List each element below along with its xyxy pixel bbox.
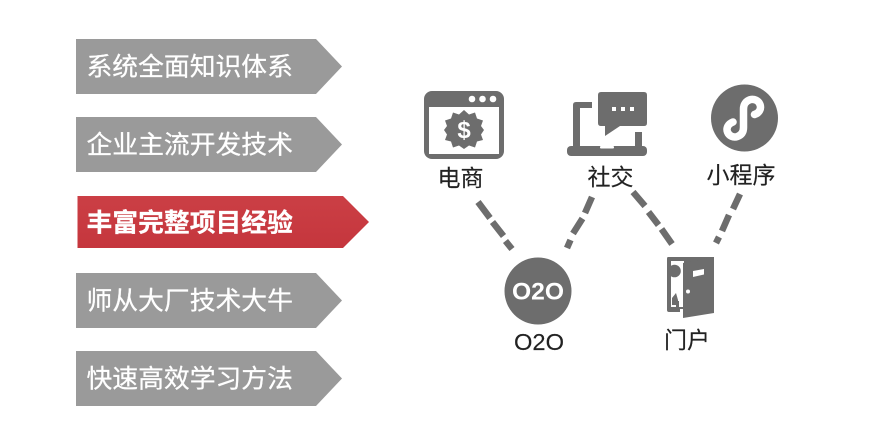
arrow item: 企业主流开发技术: [76, 117, 342, 172]
label: O2O: O2O: [514, 329, 564, 355]
icon: O2O circle badge: O2O: [512, 278, 564, 306]
icon: O2O circle badge: [504, 258, 572, 324]
icon: social laptop with chat bubble: [567, 92, 647, 156]
arrow item: 丰富完整项目经验 (highlighted): [78, 196, 369, 248]
icon: e-commerce browser window: [424, 91, 504, 159]
arrow item: 快速高效学习方法: [76, 351, 342, 406]
icon: e-commerce browser window: $: [457, 117, 471, 144]
arrow item: 师从大厂技术大牛: [76, 273, 342, 328]
label: 社交: 社交: [588, 164, 634, 190]
arrow item: 系统全面知识体系: 系统全面知识体系: [86, 52, 293, 82]
label: 电商: 电商: [438, 165, 484, 191]
dashed connector: 小程序 to 门户: [716, 194, 740, 243]
dashed connector: 社交 to 门户: [633, 192, 672, 244]
icon: portal open door with person: [667, 257, 714, 318]
arrow item: 企业主流开发技术: 企业主流开发技术: [86, 130, 293, 160]
arrow item: 快速高效学习方法: 快速高效学习方法: [86, 364, 293, 394]
dashed connector: 社交 to O2O: [567, 197, 592, 248]
arrow item: 师从大厂技术大牛: 师从大厂技术大牛: [86, 286, 293, 316]
label: 门户: 门户: [664, 327, 710, 353]
arrow item: 系统全面知识体系: [76, 39, 342, 94]
label: 小程序: 小程序: [706, 162, 776, 188]
arrow item: 丰富完整项目经验 (highlighted): 丰富完整项目经验: [86, 208, 293, 238]
dashed connector: 电商 to O2O: [478, 202, 512, 249]
icon: mini program logo: [711, 84, 778, 152]
